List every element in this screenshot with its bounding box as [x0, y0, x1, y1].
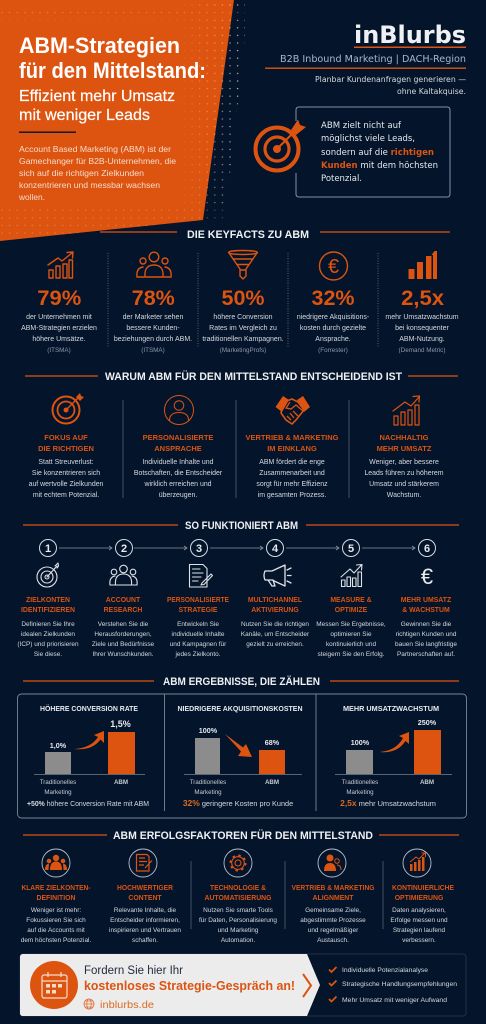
factor 3: TECHNOLOGIE &: [210, 885, 266, 892]
fact: 79%: (ITSMA): [47, 347, 71, 354]
subtitle: mit weniger Leads: [19, 107, 150, 124]
factor 3: Automation.: [221, 937, 255, 944]
step 5: Messen Sie Ergebnisse,: [316, 621, 386, 628]
step 6: [395, 564, 457, 658]
factor 4: Gemeinsame Ziele,: [305, 907, 361, 914]
chart: conversion rate: Traditionelles: [40, 779, 76, 786]
arrow: up: [379, 732, 409, 752]
panel: how ABM works: [17, 520, 459, 658]
icon: rising bars: [408, 251, 437, 279]
fact: 50%: (MarketingProfs): [220, 347, 266, 354]
panel: keyfacts: [21, 229, 459, 354]
fact: 2,5x: bei konsequenter: [395, 325, 450, 332]
checklist: Individuelle Potenzialanalyse: [342, 967, 429, 974]
panel: why ABM: [25, 370, 458, 499]
column: personalised: ANSPRACHE: [154, 444, 202, 453]
chevron: [303, 974, 311, 997]
fact: 32%: kosten durch gezielte: [300, 325, 366, 332]
column: personalised: Individuelle Inhalte und: [143, 459, 214, 466]
chart: acquisition costs: NIEDRIGERE AKQUISITIONSKOSTEN: [178, 704, 302, 713]
panel: results: [18, 675, 466, 818]
column: revenue: Wachstum.: [387, 492, 421, 499]
step 4: MULTICHANNEL: [248, 597, 302, 604]
step 1: Sie diese.: [34, 651, 62, 658]
fact: 79%: der Unternehmen mit: [26, 314, 92, 321]
factor 5: verbessern.: [402, 937, 436, 944]
chart: revenue growth: ABM: [420, 779, 434, 786]
column: revenue: NACHHALTIG: [379, 433, 429, 442]
chart: revenue growth: Marketing: [346, 789, 374, 796]
promise: ohne Kaltakquise.: [397, 86, 466, 96]
intro text: Gamechanger für B2B-Unternehmen, die: [19, 156, 176, 166]
column: personalised: [134, 396, 223, 499]
step 6: richtigen Kunden und: [396, 631, 457, 638]
icon: target: [256, 120, 306, 170]
factor 4: abgestimmte Prozesse: [300, 917, 366, 924]
intro text: wollen.: [18, 192, 45, 202]
checklist: [329, 967, 458, 1004]
chart: revenue growth: 100%: [351, 738, 370, 747]
step 2: RESEARCH: [104, 607, 142, 614]
step 3: jedes Zielkonto.: [174, 651, 221, 658]
step 2: Ziele und Bedürfnisse: [92, 641, 155, 648]
callout text: möglichst viele Leads,: [321, 133, 415, 144]
factor 1: Fokussieren Sie sich: [26, 917, 86, 924]
panel: call to action: [20, 954, 466, 1016]
icon: handshake: [276, 396, 310, 424]
step 6: Gewinnen Sie die: [401, 621, 452, 628]
fact: 79%: 79%: [37, 286, 81, 310]
factor 5: KONTINUIERLICHE: [392, 885, 454, 892]
intro text: [18, 144, 176, 202]
chart: conversion rate: 1,0%: [50, 741, 67, 750]
chart: revenue growth: [335, 704, 452, 808]
column: alignment: sorgt für mehr Effizienz: [256, 481, 328, 488]
column: revenue: [364, 396, 444, 499]
chart: acquisition costs: 32% geringere Kosten pro Kunde: [183, 798, 293, 808]
step 4: gezielt zu erreichen.: [246, 641, 304, 648]
step numbers and arrows: 5: [348, 543, 354, 555]
column: alignment: IM EINKLANG: [267, 444, 317, 453]
factor 3: und Marketing: [218, 927, 259, 934]
step 3: und Kampagnen für: [170, 641, 227, 648]
promise: Planbar Kundenanfragen generieren —: [315, 74, 466, 84]
step 2: ACCOUNT: [106, 597, 141, 604]
fact: 2,5x: [385, 251, 459, 354]
chart: conversion rate: 1,5%: [110, 719, 131, 729]
fact: 2,5x: 2,5x: [401, 286, 444, 310]
step 5: kontinuierlich und: [326, 641, 376, 648]
column: focus: DIE RICHTIGEN: [38, 444, 94, 453]
fact: 32%: Ansprache.: [315, 336, 351, 343]
chart: acquisition costs: Marketing: [194, 789, 222, 796]
panel: call to action: kostenloses Strategie-Gespräch an!: [84, 979, 295, 993]
intro text: konzentrieren und messbar wachsen: [19, 180, 160, 190]
fact: 50%: höhere Conversion: [213, 314, 273, 321]
heading: success factors: ABM ERFOLGSFAKTOREN FÜR DEN MITTELSTAND: [113, 829, 373, 842]
chart: acquisition costs: ABM: [265, 779, 279, 786]
chart: revenue growth: Traditionelles: [342, 779, 378, 786]
factor 1: DEFINITION: [36, 895, 76, 902]
icon: growth chart: [341, 564, 362, 586]
step 4: Nutzen Sie die richtigen: [241, 621, 309, 628]
panel: orange hero header: [0, 0, 245, 241]
column: revenue: Umsatz und stärkerem: [369, 481, 439, 488]
fact: 32%: niedrigere Akquisitions-: [297, 314, 370, 321]
step 5: MEASURE &: [330, 597, 372, 604]
column: focus: [29, 393, 104, 499]
fact: 50%: Rates im Vergleich zu: [209, 325, 277, 332]
factor 2: schaffen.: [132, 937, 158, 944]
fact: 78%: [114, 252, 192, 354]
factor 1: dem höchsten Potenzial.: [21, 937, 91, 944]
fact: 2,5x: (Demand Metric): [399, 347, 445, 354]
heading: why ABM: WARUM ABM FÜR DEN MITTELSTAND ENTSCHEIDEND IST: [105, 370, 402, 383]
step 3: individuelle Inhalte: [172, 631, 225, 638]
factor 2: CONTENT: [128, 895, 162, 902]
icon: document in circle: [129, 849, 157, 877]
icon: person: [164, 396, 194, 424]
step 2: Verstehen Sie die: [98, 621, 149, 628]
main title: ABM-Strategien: [19, 33, 180, 58]
chart: acquisition costs: 100%: [199, 726, 218, 735]
step 1: [17, 563, 79, 658]
step 1: IDENTIFIZIEREN: [21, 607, 75, 614]
column: focus: FOKUS AUF: [44, 433, 88, 442]
factor 2: [109, 849, 181, 944]
column: alignment: im gesamten Prozess.: [258, 492, 326, 499]
icon: target: [37, 563, 58, 587]
step 1: Definieren Sie Ihre: [21, 621, 75, 628]
icon: funnel: [228, 250, 258, 279]
column: revenue: Leads führen zu höherem: [364, 470, 444, 477]
icon: megaphone: [264, 565, 291, 586]
factor 2: Relevante Inhalte, die: [114, 907, 177, 914]
step 6: MEHR UMSATZ: [401, 597, 452, 604]
chart: conversion rate: Marketing: [44, 789, 72, 796]
heading: results: ABM ERGEBNISSE, DIE ZÄHLEN: [163, 675, 320, 688]
fact: 50%: [202, 250, 284, 354]
fact: 78%: der Marketer sehen: [123, 314, 183, 321]
fact: 78%: beziehungen durch ABM.: [114, 336, 192, 343]
fact: 79%: [21, 252, 97, 354]
fact: 32%: (Forrester): [318, 347, 348, 354]
factor 1: [21, 849, 91, 944]
factor 1: auf die Accounts mit: [27, 927, 85, 934]
factor 5: Erfolge messen und: [390, 917, 448, 924]
fact: 79%: höhere Umsätze.: [32, 336, 86, 343]
factor 4: [292, 849, 374, 944]
fact: 50%: 50%: [222, 286, 264, 310]
intro text: sich auf die richtigen Zielkunden: [19, 168, 144, 178]
step 4: Kanäle, um Entscheider: [241, 631, 310, 638]
factor 3: [199, 849, 277, 944]
step 3: PERSONALISIERTE: [167, 597, 229, 604]
factor 4: Austausch.: [317, 937, 349, 944]
column: alignment: ABM fördert die enge: [259, 459, 325, 466]
fact: 78%: bessere Kunden-: [126, 325, 180, 332]
factor 5: [390, 849, 454, 944]
fact: 32%: 32%: [312, 286, 354, 310]
icon: growth chart: [393, 396, 420, 425]
icon: growth chart: [48, 252, 73, 278]
column: focus: Statt Streuverlust:: [38, 459, 94, 466]
step 6: Partnerschaften auf.: [397, 651, 455, 658]
step 6: bauen Sie langfristige: [395, 641, 457, 648]
tagline: B2B Inbound Marketing | DACH-Region: [280, 54, 466, 65]
chart: revenue growth: 2,5x mehr Umsatzwachstum: [340, 798, 436, 808]
main title: [19, 33, 206, 83]
callout text: Kunden mit dem höchsten: [321, 160, 438, 171]
subtitle: [19, 88, 175, 124]
step 2: Ihrer Wunschkunden.: [92, 651, 154, 658]
icon: target: [52, 393, 84, 424]
chart: acquisition costs: 68%: [265, 738, 280, 747]
fact: 2,5x: mehr Umsatzwachstum: [385, 314, 459, 321]
chart: acquisition costs: Traditionelles: [190, 779, 226, 786]
checklist: Mehr Umsatz mit weniger Aufwand: [342, 997, 448, 1004]
callout text: Potenzial.: [321, 173, 362, 184]
heading: how it works: SO FUNKTIONIERT ABM: [185, 520, 298, 532]
column: personalised: wirklich erreichen und: [143, 481, 212, 488]
column: focus: auf wertvolle Zielkunden: [29, 481, 104, 488]
icon: team in circle: [318, 849, 346, 877]
fact: 32%: [297, 252, 370, 354]
step numbers and arrows: 6: [424, 543, 430, 555]
fact: 50%: traditionellen Kampagnen.: [202, 336, 284, 343]
brand block: [265, 21, 466, 96]
step numbers and arrows: 2: [121, 543, 127, 555]
chart: revenue growth: MEHR UMSATZWACHSTUM: [343, 704, 439, 713]
step 4: AKTIVIERUNG: [251, 607, 299, 614]
factor 4: ALIGNMENT: [313, 895, 354, 902]
step 5: optimieren Sie: [330, 631, 372, 638]
icon: chart in circle: [403, 849, 431, 877]
callout box: [256, 107, 450, 197]
arrow: up: [74, 731, 104, 749]
factor 3: für Daten, Personalisierung: [199, 917, 277, 924]
factor 4: VERTRIEB & MARKETING: [292, 885, 374, 892]
subtitle: Effizient mehr Umsatz: [19, 88, 175, 105]
column: revenue: MEHR UMSATZ: [377, 444, 432, 453]
callout text: sondern auf die richtigen: [321, 147, 434, 158]
step 6: & WACHSTUM: [402, 607, 450, 614]
step 3: Entwickeln Sie: [177, 621, 219, 628]
step 1: idealen Zielkunden: [21, 631, 75, 638]
factor 5: Daten analysieren,: [392, 907, 446, 914]
panel: success factors: [21, 829, 459, 944]
step numbers and arrows: 4: [272, 543, 279, 555]
arrow: down: [225, 734, 252, 757]
factor 2: Entscheider informieren,: [110, 917, 180, 924]
chart: revenue growth: 250%: [418, 718, 437, 727]
step 2: [92, 565, 155, 658]
heading: keyfacts: DIE KEYFACTS ZU ABM: [187, 229, 309, 241]
website: inblurbs.de: [100, 999, 154, 1011]
factor 5: Strategien laufend: [393, 927, 446, 934]
column: alignment: VERTRIEB & MARKETING: [246, 433, 339, 442]
factor 2: HOCHWERTIGER: [117, 885, 173, 892]
icon: people in circle: [42, 849, 70, 877]
factor 2: inspirieren und Vertrauen: [109, 927, 181, 934]
factor 5: OPTIMIERUNG: [395, 895, 443, 902]
checklist: Strategische Handlungsempfehlungen: [342, 981, 458, 988]
callout text: ABM zielt nicht auf: [321, 120, 402, 131]
step numbers and arrows: 1: [45, 543, 51, 555]
fact: 78%: (ITSMA): [141, 347, 165, 354]
factor 1: Weniger ist mehr:: [31, 907, 81, 914]
icon: calendar: [30, 961, 78, 1009]
icon: euro: €: [421, 564, 433, 589]
icon: globe: [84, 999, 94, 1009]
icon: people: [110, 565, 137, 585]
column: alignment: Zusammenarbeit und: [259, 470, 325, 477]
step 5: steigern Sie den Erfolg.: [318, 651, 385, 658]
step numbers and arrows: [40, 540, 436, 556]
column: personalised: Botschaften, die Entscheider: [134, 470, 223, 477]
factor 4: und regelmäßiger: [308, 927, 359, 934]
factor 3: Nutzen Sie smarte Tools: [203, 907, 273, 914]
fact: 79%: ABM-Strategien erzielen: [21, 325, 97, 332]
step 4: [241, 565, 310, 648]
column: personalised: PERSONALISIERTE: [143, 433, 213, 442]
column: focus: mit echtem Potenzial.: [33, 492, 99, 499]
step 1: ZIELKONTEN: [26, 597, 70, 604]
intro text: Account Based Marketing (ABM) ist der: [19, 144, 171, 154]
column: alignment: [246, 396, 339, 499]
step 5: [316, 564, 386, 658]
factor 1: KLARE ZIELKONTEN-: [22, 885, 91, 892]
step 1: (ICP) und priorisieren: [17, 641, 79, 648]
logo: inBlurbs: [354, 21, 466, 49]
callout text: [321, 120, 438, 184]
step 3: [167, 564, 229, 658]
step 2: Herausforderungen,: [94, 631, 152, 638]
step 3: STRATEGIE: [179, 607, 218, 614]
main title: für den Mittelstand:: [19, 58, 206, 83]
step numbers and arrows: 3: [196, 543, 202, 555]
chart: conversion rate: HÖHERE CONVERSION RATE: [40, 704, 138, 713]
column: personalised: überzeugen.: [159, 492, 197, 499]
chart: conversion rate: [27, 704, 149, 808]
chart: conversion rate: ABM: [114, 779, 128, 786]
chart: acquisition costs: [178, 704, 302, 808]
factor 3: AUTOMATISIERUNG: [204, 895, 272, 902]
column: focus: Sie konzentrieren sich: [32, 470, 100, 477]
cta text: Fordern Sie hier Ihr: [84, 965, 183, 977]
icon: document: [190, 564, 212, 587]
fact: 2,5x: ABM-Nutzung.: [399, 336, 445, 343]
chart: conversion rate: +50% höhere Conversion Rate mit ABM: [27, 801, 149, 808]
icon: people: [137, 252, 171, 277]
fact: 78%: 78%: [132, 286, 175, 310]
icon: gear in circle: [224, 849, 252, 877]
icon: euro: €: [328, 256, 339, 278]
promise: [315, 74, 466, 96]
step 5: OPTIMIZE: [335, 607, 368, 614]
column: revenue: Weniger, aber bessere: [369, 459, 439, 466]
